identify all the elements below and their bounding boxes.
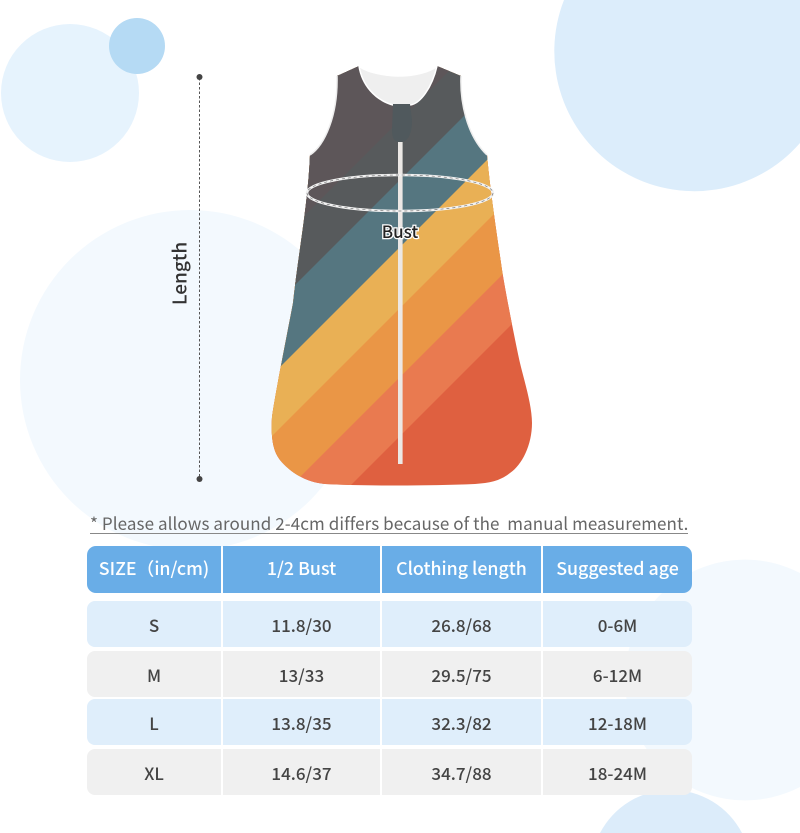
header row: SIZE（in/cm) — [99, 555, 209, 581]
row M: 29.5/75 — [431, 662, 492, 686]
row M: 13/33 — [279, 662, 324, 686]
header row: Suggested age — [556, 555, 679, 581]
row M: M — [147, 662, 161, 686]
measurement note: * Please allows around 2-4cm differs because of the manual measurement. — [90, 510, 688, 534]
garment stripes — [272, 66, 532, 486]
row XL: 34.7/88 — [431, 760, 492, 784]
row L — [87, 699, 692, 745]
row S: 0-6M — [598, 612, 637, 636]
row S: 11.8/30 — [271, 612, 332, 636]
header row: 1/2 Bust — [267, 555, 336, 581]
row S: S — [149, 612, 159, 636]
header row — [87, 546, 692, 593]
sleep sack garment with measurements — [172, 66, 532, 486]
garment white edge — [310, 76, 487, 155]
zipper flap — [392, 104, 412, 142]
row XL — [87, 749, 692, 795]
bust measuring ellipse — [307, 175, 493, 211]
neck lining — [359, 66, 437, 105]
row L: 13.8/35 — [271, 710, 332, 734]
size table — [87, 546, 692, 795]
row L: L — [149, 710, 159, 734]
bust label: Bust — [382, 218, 418, 243]
row M — [87, 651, 692, 697]
row M: 6-12M — [593, 662, 642, 686]
row XL: XL — [144, 760, 164, 784]
length measure line — [196, 74, 202, 482]
row S — [87, 601, 692, 647]
row S: 26.8/68 — [431, 612, 492, 636]
row XL: 18-24M — [588, 760, 647, 784]
header row: Clothing length — [396, 555, 527, 581]
row L: 32.3/82 — [431, 710, 492, 734]
length label: Length — [166, 242, 192, 305]
row XL: 14.6/37 — [271, 760, 332, 784]
row L: 12-18M — [588, 710, 647, 734]
zipper — [398, 142, 403, 464]
